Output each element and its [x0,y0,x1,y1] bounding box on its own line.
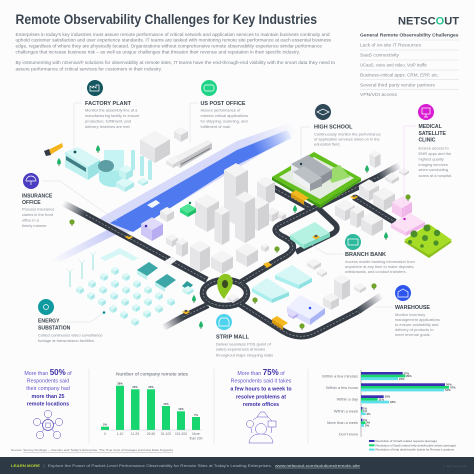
bar chart: time to resolve problems: More than a week [327,420,358,425]
panel: US post office: for shipping, scanning, and [200,118,248,124]
bar chart: time to resolve problems: 1% [363,418,368,422]
panel: general challenges list: Several third party vendor partners [360,82,436,88]
chart legend [369,440,456,452]
panel: medical satellite clinic: CLINIC [418,137,436,143]
panel: medical satellite clinic: when conducting [418,167,448,172]
panel: warehouse: meet revenue goals. [395,332,431,337]
panel: medical satellite clinic: Ensure access to [418,146,450,150]
callout: 75 percent: resolve problems at [236,394,286,400]
icon: factory [87,80,103,96]
panel: high school [301,104,382,160]
illustration: energy substation [67,248,194,326]
panel: warehouse: Monitor inventory [395,312,425,317]
panel: high school: of application services relied on in the [314,137,380,142]
panel: high school: Continuously monitor the performance [314,132,382,136]
panel: high school: HIGH SCHOOL [314,124,352,130]
panel: general challenges list: SaaS connectivity [360,52,400,58]
footer bar: Explore the Power of Packet-Level Performance Observability for Remote Sites at Today's Leading Enterprises. [48,463,272,468]
panel: energy substation: Collect continuous video surveillance [38,332,103,338]
panel: US post office: fulfillment of mail. [200,124,231,129]
bar chart: number of company remote sites: Number of company remote sites [116,372,189,376]
bar chart: time to resolve problems: 18% [390,400,396,404]
panel: US post office: Assure performance of [200,108,241,113]
bar chart: time to resolve problems: 27% [404,371,410,375]
panel: medical satellite clinic [404,104,452,215]
panel: factory plant: delivery timelines are met. [85,124,131,129]
panel: factory plant: FACTORY PLANT [85,101,132,107]
panel: factory plant [74,80,140,153]
bar chart: time to resolve problems: Don't know [339,432,358,436]
intro text block: edge, regardless of where they are physically located. Organizations without comprehensive remote observability experience similar performance [16,43,323,48]
footer bar: www.netscout.com/solutions/remote-site [275,463,361,468]
icon: graduation cap [315,104,331,120]
bar chart: number of company remote sites: 7% [194,413,199,417]
illustration: trucks and vans [44,143,288,330]
panel: US post office: mission critical applications [200,113,248,118]
footer bar [0,457,474,474]
panel: warehouse: management applications [395,317,440,322]
bar chart: time to resolve problems: 24% [399,377,405,381]
panel: insurance office: claims in the front [22,212,54,217]
bar chart: time to resolve problems: 2% [365,423,370,427]
intro text block: assure performance of critical services for customers in their industry. [16,66,162,72]
panel: energy substation: SUBSTATION [38,326,71,332]
callout: 75 percent: remote offices [243,402,279,408]
footer bar: | [44,463,45,468]
bar chart: number of company remote sites: 25% [148,385,154,389]
bar chart: time to resolve problems: 1% [363,409,368,413]
callout: 50 percent: more than 25 [32,394,65,400]
panel: factory plant: Monitor the assembly line at a [85,108,138,113]
panel: medical satellite clinic: scans at a hospital. [418,173,452,178]
panel: medical satellite clinic: highest quality [418,156,444,161]
bar chart: number of company remote sites: 1-10 [117,432,123,436]
illustration: medical clinic [391,196,425,236]
panel: insurance office: INSURANCE [22,194,53,200]
bar chart: number of company remote sites: 101-200 [175,432,187,436]
bar chart: time to resolve problems: 55% [446,383,452,387]
intro text block: uphold customer satisfaction and user experience standards. IT teams are tasked with monitoring remote site performance at each essential business [16,37,331,42]
callout: 75 percent: Respondents said it takes [231,379,292,385]
bar chart: time to resolve problems [308,369,456,452]
panel: insurance office: Process insurance [22,206,55,212]
chart legend: Resolution of help desk/trouble tickets for Remote Locations [376,449,455,452]
intro text block: By instrumenting with nGenius® solutions for observability at remote sites, IT teams have the end-through-end visibility with the smart data they need to [16,60,336,65]
panel: branch bank: withdrawals, and conduct transfers. [345,269,407,274]
bar chart: number of company remote sites: 51-100 [161,432,171,436]
panel: US post office: US POST OFFICE [200,101,246,107]
panel: insurance office [22,173,147,228]
bar chart: time to resolve problems: 3% [366,412,371,416]
panel: branch bank: anywhere at any time to make deposits, [345,264,414,269]
callout: 50 percent: remote locations [27,402,69,408]
strip mall map pin [217,274,238,303]
icon: umbrella [23,173,39,189]
panel: warehouse: delivery of products to [395,327,434,332]
bar chart: number of company remote sites: than 200 [190,436,203,440]
panel: branch bank [312,234,416,274]
bar chart: time to resolve problems: Within a day [337,397,358,402]
bar chart: number of company remote sites: 2% [103,422,108,426]
panel: medical satellite clinic: EMR apps and the [418,151,452,156]
illustration: city towers [141,163,286,274]
panel: medical satellite clinic: imaging services [418,162,448,167]
panel: warehouse: to ensure availability and [395,322,438,327]
bar chart: time to resolve problems: Within a few minutes [322,373,358,378]
intro text block: Enterprises in today's key industries must assure remote performance of critical network and application services to maintain business continuity and [16,32,330,37]
panel: US post office [190,80,248,143]
panel: high school: education field. [314,142,340,147]
callout: 75 percent: a few hours to a week to [230,386,292,392]
panel: strip mall: throughout major shopping malls [216,352,273,357]
icon: warehouse [395,285,411,301]
panel: general challenges list: General Remote Observability Challenges [360,32,459,37]
callout: 50 percent [24,368,72,439]
icon: bank card [345,234,361,250]
illustration: warehouse building [287,275,366,325]
bar chart: number of company remote sites: 0 [104,432,106,436]
bar chart: number of company remote sites [89,369,214,444]
chart legend: Resolution of UCaaS related requests (average) [376,440,437,443]
panel: branch bank: BRANCH BANK [345,252,386,258]
bar chart: time to resolve problems: 54% [445,388,451,392]
panel: medical satellite clinic: SATELLITE [418,131,446,137]
illustration: branch bank building [290,222,330,249]
bar chart: number of company remote sites: 26-50 [147,432,155,436]
illustration: factory plant [65,147,152,192]
panel: factory plant: production, fulfillment, and [85,118,131,124]
panel: medical satellite clinic: MEDICAL [418,124,442,130]
river [50,122,298,262]
icon: energy [38,299,54,315]
chart legend: Resolution of SaaS related help desk/trouble tickets (average) [376,444,456,447]
bar chart: time to resolve problems: 1% [363,406,368,410]
illustration: post office and grey block [140,127,212,168]
panel: general challenges list: VPN/VDI access [360,92,398,97]
bar chart: number of company remote sites: 28% [117,382,123,386]
icon: post [201,80,217,96]
panel: strip mall [216,314,273,357]
panel: general challenges list: UCaaS, voice and video, VoIP traffic [360,62,428,68]
bar chart: number of company remote sites: 15% [163,402,169,406]
footer bar: © NETSCOUT [443,465,468,468]
roads [63,165,400,336]
panel: strip mall: STRIP MALL [216,335,249,341]
icon: hub and sites [33,410,63,439]
bar chart: time to resolve problems: Within a week [334,408,358,413]
callout: 50 percent: Respondents said [27,378,69,384]
panel: strip mall: Deliver seamless POS (point of [216,341,272,346]
intro text block: challenges that increase business risk – as well as unique challenges that threaten their revenue and reputation in their specific industry. [16,49,300,54]
bar chart: time to resolve problems: 15% [384,395,391,399]
illustration: teal warehouses [252,258,327,303]
panel: warehouse [309,285,440,337]
bar chart: time to resolve problems: 3% [366,421,371,425]
panel: factory plant: manufacturing facility to ensure [85,113,140,118]
bar chart: time to resolve problems: Within a few hours [326,385,358,390]
panel: warehouse: WAREHOUSE [395,305,431,311]
panel: energy substation: ENERGY [38,318,60,324]
bar chart: number of company remote sites: More [192,432,200,436]
icon: person with document and alert [246,412,276,443]
title: Remote Observability Challenges for Key Industries [16,12,317,27]
callout: 50 percent: More than 50% of [24,368,72,377]
panel: branch bank: Access mobile banking information from [345,259,416,264]
panel: insurance office: timely manner [22,223,47,228]
callout: 75 percent: More than 75% of [237,368,285,377]
bar chart: number of company remote sites: 25% [132,385,138,389]
illustration: park [404,224,452,258]
illustration: trees [57,145,411,330]
panel: general challenges list [360,32,459,97]
source note: Source: Survey Findings – nGenius and Today's Enterprise: The True Cost of Outages and How Data Supports [11,448,174,452]
panel: insurance office: office in a [22,218,40,223]
icon: storefront [216,314,232,330]
panel: general challenges list: Business-critical apps: CRM, ERP, etc. [360,72,439,78]
bar chart: time to resolve problems: 11% [378,397,384,401]
callout: 75 percent [230,368,292,443]
bar chart: number of company remote sites: 12% [178,407,184,411]
illustration: right side grey buildings [335,151,409,236]
intro text block [16,32,336,72]
illustration: school bus and taxi [291,190,358,205]
icon: medical monitor [418,104,434,120]
panel: general challenges list: Lack of on-site IT Resources [360,42,422,48]
NETSCOUT logo: NETSCOUT [398,16,459,28]
bar chart: number of company remote sites: 11-25 [131,432,139,436]
panel: insurance office: OFFICE [22,200,41,206]
bar chart: time to resolve problems: 57% [450,385,456,389]
panel: energy substation [38,299,105,343]
panel: strip mall: sales) experiences at kiosks [216,347,265,352]
panel: energy substation: footage at transmission facilities. [38,338,95,343]
illustration: school campus [272,152,361,208]
footer bar: LEARN MORE [11,463,40,468]
bar chart: time to resolve problems: 29% [406,374,412,378]
callout: 50 percent: their company had [26,386,70,392]
boat [147,200,160,208]
